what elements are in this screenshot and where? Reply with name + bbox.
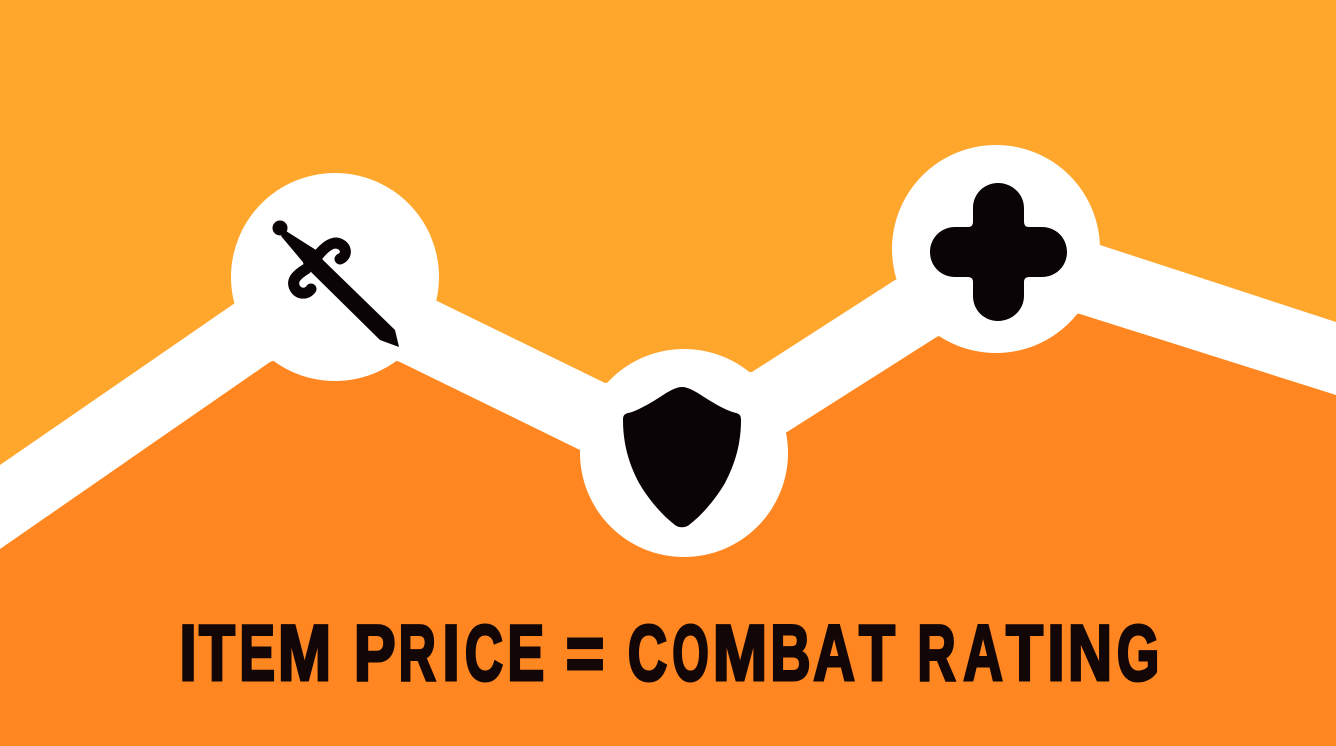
node: sword xyxy=(231,173,439,381)
headline: item price = combat rating: N xyxy=(1068,608,1112,697)
headline: item price = combat rating: E xyxy=(507,608,544,697)
headline: item price = combat rating: I xyxy=(1047,608,1065,697)
headline: item price = combat rating: T xyxy=(199,608,235,697)
node: shield xyxy=(580,349,788,557)
headline: item price = combat rating: B xyxy=(770,608,811,697)
headline: item price = combat rating: R xyxy=(917,608,956,697)
headline: item price = combat rating: C xyxy=(628,608,667,697)
headline: item price = combat rating: I xyxy=(179,608,197,697)
headline: item price = combat rating: T xyxy=(859,608,895,697)
node circle: sword xyxy=(231,173,439,381)
headline: item price = combat rating: E xyxy=(239,608,275,697)
headline: item price = combat rating: T xyxy=(1006,608,1043,697)
node circle: plus xyxy=(892,145,1100,353)
node circle: shield xyxy=(580,349,788,557)
lower area: dark orange chart fill xyxy=(0,314,1336,746)
headline: item price = combat rating: R xyxy=(398,608,436,697)
headline: item price = combat rating xyxy=(179,608,1159,697)
headline: item price = combat rating: M xyxy=(713,608,767,697)
headline: item price = combat rating: M xyxy=(278,608,331,697)
icon: health cross xyxy=(930,183,1067,321)
icon: shield xyxy=(623,387,741,527)
headline: item price = combat rating: C xyxy=(465,608,503,697)
white trend line xyxy=(0,240,1336,549)
headline: item price = combat rating: = xyxy=(566,608,604,697)
headline: item price = combat rating: A xyxy=(963,608,1003,697)
headline: item price = combat rating: I xyxy=(442,608,460,697)
headline: item price = combat rating: A xyxy=(813,608,855,697)
headline: item price = combat rating: G xyxy=(1117,608,1160,697)
node: plus xyxy=(892,145,1100,353)
headline: item price = combat rating: O xyxy=(672,608,709,697)
headline: item price = combat rating: P xyxy=(354,608,396,697)
icon: sword xyxy=(272,220,399,347)
